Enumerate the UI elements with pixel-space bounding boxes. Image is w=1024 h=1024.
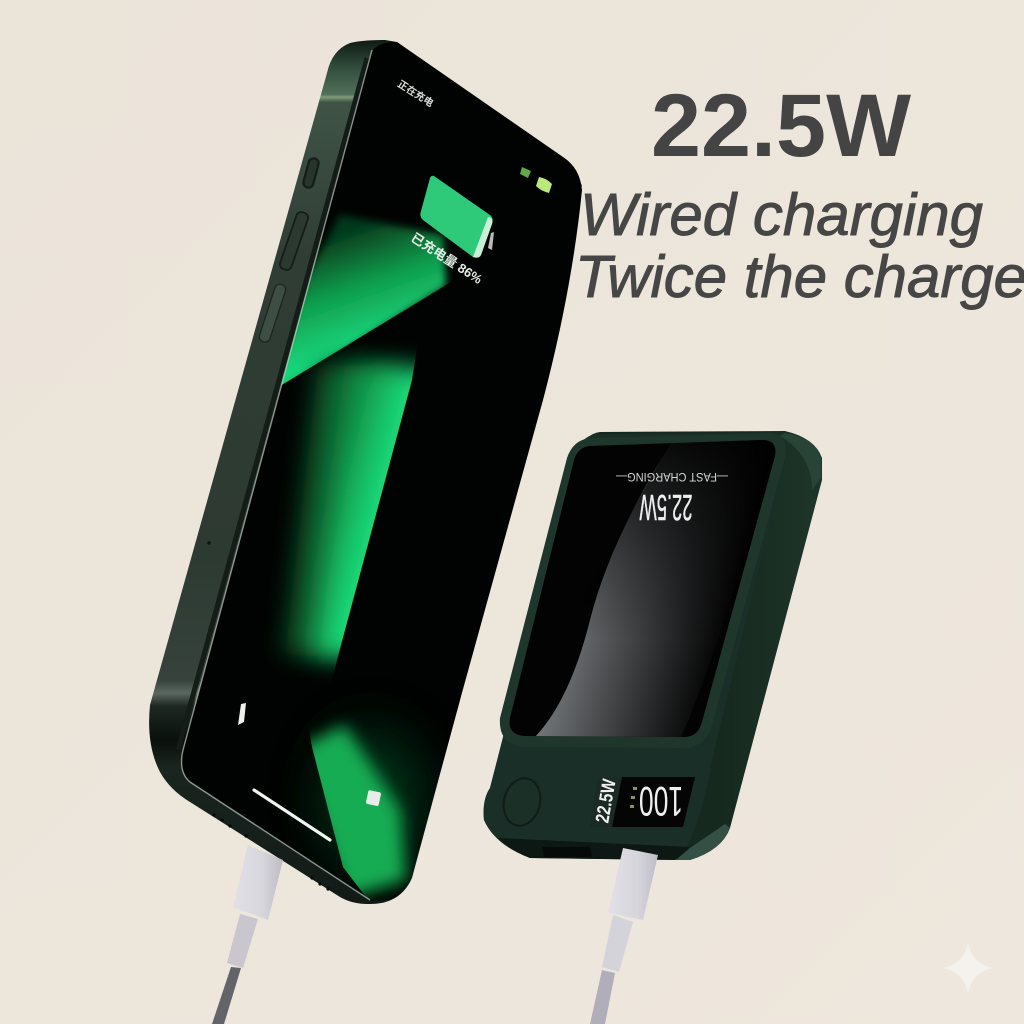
glass sheen [535, 438, 775, 740]
phone [149, 40, 582, 904]
power bank cable [590, 848, 658, 1024]
camera icon [366, 790, 381, 806]
glass label: fast charging: —FAST CHARGING— [616, 470, 728, 484]
display text: 22.5W: 22.5W [592, 778, 621, 825]
screen edge highlight [182, 50, 372, 900]
bank bottom slab [498, 838, 690, 860]
power bank [484, 431, 822, 860]
home indicator [254, 790, 330, 840]
display indicators [630, 787, 637, 808]
side dot [207, 541, 211, 545]
phone cable [212, 845, 283, 1024]
phone frame inner line [178, 58, 367, 750]
phone speaker holes [212, 813, 330, 891]
bank glass [510, 440, 775, 737]
battery label: 已充电量 86% [408, 230, 485, 287]
status icons [520, 167, 552, 193]
sparkle icon [943, 943, 993, 993]
subtitle: Twice the charge: Twice the charge [575, 244, 1024, 310]
power button [499, 774, 545, 830]
USB port [542, 847, 592, 857]
subtitle: Wired charging: Wired charging [580, 182, 983, 248]
flashlight icon [238, 703, 246, 725]
bank bottom right corner [676, 824, 730, 860]
bank body [484, 431, 822, 860]
LED display [590, 777, 695, 827]
bank front face [484, 433, 787, 856]
display number: 100: 100 [639, 778, 683, 825]
bank top right highlight [780, 433, 821, 490]
phone side buttons [258, 157, 320, 343]
phone frame [149, 40, 582, 904]
bank rim [500, 433, 786, 748]
phone screen [182, 42, 582, 901]
battery icon [420, 176, 494, 258]
status text: 正在充电 [395, 77, 436, 110]
glass label: 22.5W: 22.5W [639, 487, 692, 528]
title: 22.5W: 22.5W [651, 75, 911, 175]
wallpaper green shapes [270, 215, 446, 898]
